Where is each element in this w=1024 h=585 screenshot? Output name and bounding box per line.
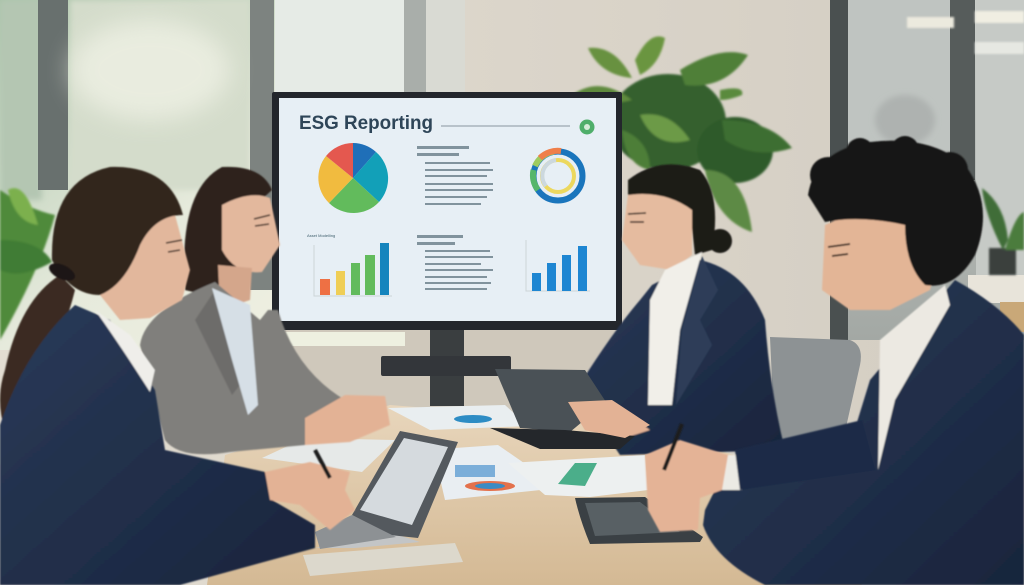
- hair: [184, 167, 272, 295]
- jacket: [0, 305, 315, 585]
- woman: left foreground: [0, 167, 355, 585]
- hand: [265, 462, 355, 530]
- pie chart: [318, 143, 388, 213]
- tablet: on table right: [575, 497, 703, 544]
- bar chart: left: [307, 233, 392, 296]
- face: [622, 194, 692, 270]
- pen: [664, 424, 682, 470]
- shirt: [878, 285, 950, 470]
- shirt collar: [95, 310, 155, 392]
- eye: [166, 240, 182, 252]
- face: [822, 205, 945, 310]
- chair: presenter: [770, 337, 861, 445]
- bar chart: right: [526, 240, 590, 291]
- eye: [254, 215, 270, 226]
- eye: [828, 244, 850, 256]
- laptop: [315, 431, 458, 549]
- jacket: [140, 282, 345, 454]
- document: right report: [508, 455, 648, 497]
- hand: [570, 400, 650, 438]
- man: right: [645, 136, 1024, 585]
- lapel: [195, 290, 240, 395]
- document: left sheet: [262, 438, 395, 472]
- woman: second from left: [140, 167, 390, 454]
- hands: [305, 395, 390, 445]
- pen: [315, 450, 330, 478]
- neck: [218, 265, 252, 310]
- hair tie: [46, 260, 78, 284]
- shirt: [212, 288, 258, 415]
- plant: right shelf: [982, 188, 1024, 275]
- documents on table: [262, 405, 648, 576]
- monitor stand: [381, 326, 511, 406]
- woman: presenter: [570, 164, 785, 455]
- ponytail: [0, 275, 75, 430]
- text block: lower list: [417, 235, 493, 290]
- hair: [628, 164, 715, 255]
- hair: [808, 141, 983, 286]
- arm and sleeve: [735, 420, 875, 490]
- screen title: ESG Reporting: [299, 113, 433, 134]
- eye: [628, 213, 646, 222]
- document: top chart sheet: [388, 405, 528, 430]
- text block: upper list: [417, 146, 493, 205]
- document: centre report: [438, 445, 560, 500]
- plant: behind screen: [572, 36, 792, 240]
- jacket: [570, 260, 785, 455]
- screen: ESG Reporting dashboard: [272, 92, 622, 330]
- jacket: [703, 280, 1024, 585]
- lapel: [676, 256, 718, 405]
- face: [222, 195, 280, 272]
- table: [207, 405, 862, 585]
- hair: [52, 167, 183, 295]
- plant: left window: [0, 188, 55, 340]
- hand: [645, 440, 728, 532]
- hand: presenter front: [568, 400, 650, 438]
- bar chart: left: Asset Modelling: [307, 233, 335, 238]
- tablet: held by presenter: [490, 369, 635, 449]
- donut chart: [533, 151, 582, 200]
- icon: green badge: [580, 120, 594, 134]
- window glare: [70, 20, 230, 120]
- shirt: [648, 252, 702, 405]
- face: [95, 215, 190, 320]
- notepad: [303, 543, 463, 576]
